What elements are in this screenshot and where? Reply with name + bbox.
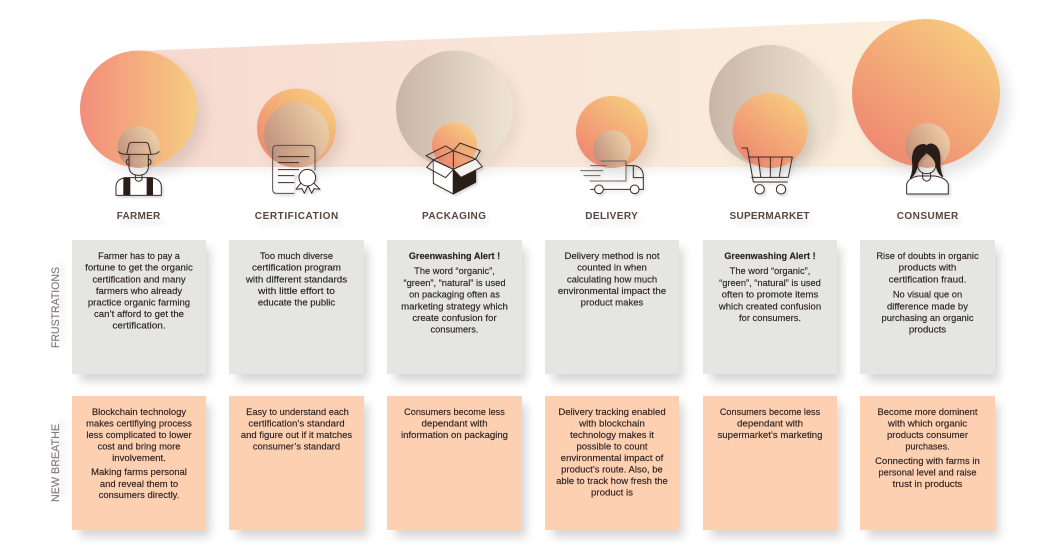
- panel: certification frustrations: with little effort to: [257, 286, 335, 297]
- label: certification: CERTIFICATION: [255, 211, 338, 222]
- panel: delivery new breathe: product’s route. Also, be: [561, 464, 663, 475]
- panel: packaging frustrations: marketing strategy which: [401, 302, 508, 312]
- icon: farmer: [116, 142, 161, 195]
- panel: farmer new breathe: [72, 396, 210, 537]
- panel: delivery new breathe: [545, 396, 683, 537]
- column: packaging header: [396, 50, 520, 194]
- panel: consumer new breathe: Connecting with farms in: [875, 456, 980, 467]
- panel: delivery new breathe: Delivery tracking enabled: [558, 407, 666, 418]
- panel: farmer frustrations: farmers who already: [96, 286, 182, 297]
- panel: certification frustrations: Too much diverse: [260, 251, 333, 262]
- panel: farmer frustrations: Farmer has to pay a: [98, 251, 180, 262]
- panel: delivery new breathe: technology makes it: [570, 430, 654, 441]
- panel: supermarket new breathe: Consumers become less: [720, 407, 820, 418]
- panel: delivery new breathe: environmental impact of: [561, 453, 664, 464]
- panel: certification new breathe: consumer’s standard: [253, 442, 340, 452]
- panel: certification frustrations: [229, 240, 368, 381]
- panel: packaging new breathe: information on packaging: [401, 430, 508, 441]
- panel: packaging frustrations: consumers.: [430, 324, 478, 336]
- panel: certification frustrations: certification program: [252, 263, 341, 274]
- panel: supermarket frustrations: for consumers.: [739, 313, 801, 324]
- panel: farmer new breathe: cost and bring more: [98, 441, 180, 452]
- panel: farmer new breathe: involvement.: [112, 453, 166, 464]
- side label: new breathe: NEW BREATHE: [50, 424, 62, 502]
- panel: consumer new breathe: purchases.: [905, 442, 950, 452]
- panel: certification new breathe: [229, 396, 368, 537]
- panel: packaging frustrations: Greenwashing Alert !: [409, 251, 500, 262]
- panel: packaging frustrations: on packaging often as: [409, 290, 500, 300]
- panel: consumer frustrations: certification fraud.: [889, 274, 966, 285]
- label: farmer: FARMER: [117, 211, 161, 222]
- panel: delivery new breathe: able to track how fresh the: [556, 476, 668, 487]
- column: delivery header: [576, 96, 655, 194]
- panel: delivery frustrations: product makes: [581, 298, 644, 308]
- panel: delivery frustrations: Delivery method is not: [564, 251, 660, 262]
- panel: packaging new breathe: Consumers become less: [404, 407, 505, 418]
- panel: consumer frustrations: products with: [899, 263, 956, 274]
- panel: supermarket new breathe: [703, 396, 841, 537]
- panel: farmer new breathe: consumers directly.: [99, 490, 179, 501]
- panel: packaging frustrations: [387, 240, 526, 381]
- panel: delivery frustrations: counted in when: [577, 263, 647, 274]
- panel: consumer new breathe: with which organic: [887, 418, 967, 430]
- panel: consumer frustrations: purchasing an organic: [882, 313, 974, 324]
- panel: certification new breathe: Easy to understand each: [246, 407, 349, 418]
- panel: delivery frustrations: calculating how much: [567, 274, 657, 285]
- panel: farmer new breathe: makes certifiying process: [86, 418, 192, 429]
- icon: shopping cart: [742, 148, 792, 194]
- column: consumer header: [852, 19, 1009, 194]
- icon: delivery truck: [581, 161, 643, 194]
- panel: consumer frustrations: [860, 240, 999, 381]
- panel: farmer new breathe: Blockchain technology: [92, 407, 186, 418]
- panel: supermarket frustrations: [703, 240, 841, 381]
- panel: packaging new breathe: [387, 396, 526, 537]
- panel: consumer new breathe: products consumer: [887, 430, 969, 441]
- panel: consumer new breathe: personal level and raise: [878, 467, 976, 478]
- panel: certification new breathe: and figure out if it matches: [241, 430, 352, 441]
- panel: certification new breathe: certification’s standard: [248, 418, 345, 430]
- column: farmer header: [80, 50, 205, 195]
- panel: farmer new breathe: and reveal them to: [100, 479, 178, 490]
- panel: supermarket frustrations: which created confusion: [718, 302, 821, 312]
- panel: farmer new breathe: Making farms personal: [91, 467, 187, 478]
- panel: farmer frustrations: certification and many: [92, 274, 186, 285]
- panel: delivery new breathe: with blockchain: [578, 418, 645, 430]
- icon: certificate: [273, 145, 320, 193]
- panel: supermarket frustrations: Greenwashing Alert !: [724, 251, 816, 262]
- icon: box: [426, 143, 482, 194]
- panel: farmer frustrations: certification.: [112, 321, 166, 332]
- panel: delivery new breathe: product is: [591, 488, 633, 499]
- side label: frustrations: FRUSTRATIONS: [50, 267, 62, 348]
- panel: consumer frustrations: Rise of doubts in organic: [876, 251, 979, 262]
- panel: delivery frustrations: environmental impact the: [558, 286, 666, 297]
- panel: consumer new breathe: Become more dominent: [878, 407, 978, 418]
- panel: supermarket frustrations: The word “organic”,: [730, 266, 810, 277]
- panel: consumer frustrations: products: [909, 324, 946, 336]
- panel: farmer new breathe: less complicated to lower: [86, 430, 192, 441]
- panel: consumer new breathe: trust in products: [893, 479, 963, 490]
- panel: packaging frustrations: “green”, “natural” is used: [404, 278, 506, 289]
- panel: delivery new breathe: possible to count: [576, 441, 648, 452]
- panel: consumer frustrations: No visual que on: [893, 290, 962, 300]
- panel: supermarket new breathe: supermarket’s marketing: [718, 430, 822, 441]
- panel: certification frustrations: educate the public: [258, 298, 335, 308]
- panel: certification frustrations: with different standards: [245, 274, 347, 285]
- column: certification header: [257, 88, 343, 193]
- background band: [138, 20, 930, 173]
- panel: delivery frustrations: [545, 240, 683, 381]
- label: delivery: DELIVERY: [585, 211, 638, 222]
- label: consumer: CONSUMER: [897, 211, 959, 222]
- panel: supermarket frustrations: often to promote items: [722, 290, 819, 300]
- panel: farmer frustrations: [72, 240, 210, 381]
- label: packaging: PACKAGING: [422, 211, 486, 222]
- panel: farmer frustrations: fortune to get the organic: [85, 263, 193, 274]
- panel: farmer frustrations: can’t afford to get the: [94, 309, 184, 320]
- panel: packaging frustrations: The word “organic”,: [414, 266, 495, 277]
- panel: packaging new breathe: dependant with: [422, 418, 488, 430]
- panel: supermarket frustrations: “green”, “natural” is used: [719, 278, 821, 289]
- label: supermarket: SUPERMARKET: [730, 211, 810, 222]
- panel: farmer frustrations: practice organic farming: [88, 298, 190, 308]
- icon: consumer: [907, 144, 948, 194]
- panel: consumer frustrations: difference made by: [887, 302, 968, 312]
- panel: packaging frustrations: create confusion for: [412, 313, 497, 324]
- panel: supermarket new breathe: dependant with: [737, 418, 803, 430]
- panel: consumer new breathe: [860, 396, 999, 537]
- column: supermarket header: [709, 45, 839, 194]
